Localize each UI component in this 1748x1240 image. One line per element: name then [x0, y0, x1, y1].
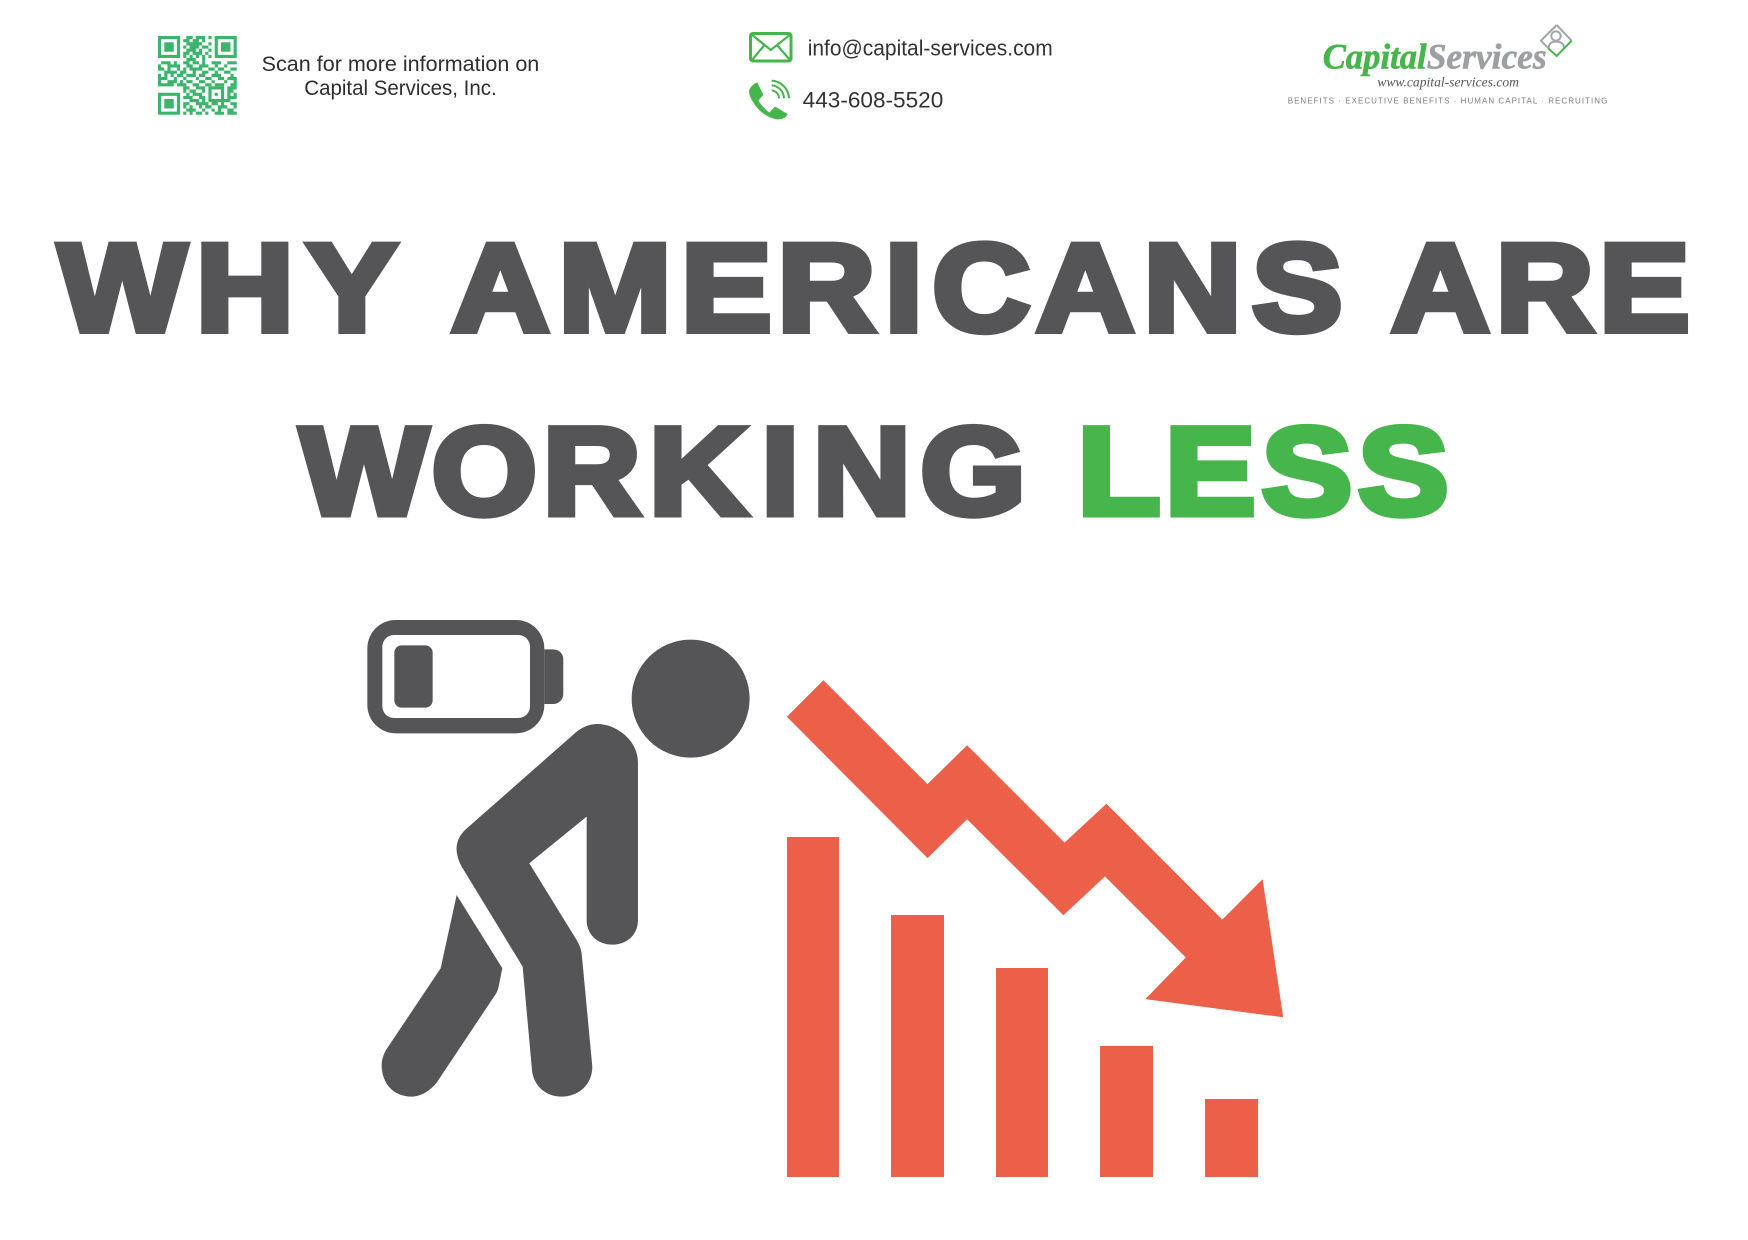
logo tagline: BENEFITS · EXECUTIVE BENEFITS · HUMAN CAPITAL · RECRUITING	[1288, 96, 1607, 106]
title line 2: LESS	[1078, 403, 1448, 541]
panel: header QR and scan text	[158, 36, 539, 115]
logo wordmark: Capital	[1323, 36, 1427, 76]
text: email: info@capital-services.com	[808, 36, 1053, 60]
text: phone number: 443-608-5520	[803, 88, 943, 113]
text: scan prompt: Capital Services, Inc.	[304, 76, 497, 100]
icon: envelope	[750, 34, 791, 61]
icon: tired person with low battery	[367, 620, 750, 1097]
panel: contact details	[749, 34, 1053, 119]
icon: QR code	[158, 36, 237, 115]
logo wordmark: Services	[1427, 36, 1547, 76]
icon: logo diamond with person	[1541, 25, 1572, 56]
back leg	[382, 895, 502, 1097]
icon: phone	[749, 81, 789, 119]
text: scan prompt	[262, 52, 539, 100]
title line 2	[300, 403, 1448, 541]
logo website: www.capital-services.com	[1377, 75, 1519, 90]
text: scan prompt: Scan for more information on	[262, 52, 539, 76]
head	[632, 640, 750, 758]
chart: declining bars	[787, 837, 1258, 1177]
title line 1: WHY AMERICANS ARE	[59, 220, 1690, 357]
torso, arm and front leg	[457, 724, 638, 1097]
battery	[367, 620, 563, 733]
panel: company logo	[1288, 25, 1607, 106]
title	[59, 220, 1690, 541]
title line 2: WORKING	[300, 403, 1062, 541]
arrow: downward trend	[787, 680, 1283, 1017]
